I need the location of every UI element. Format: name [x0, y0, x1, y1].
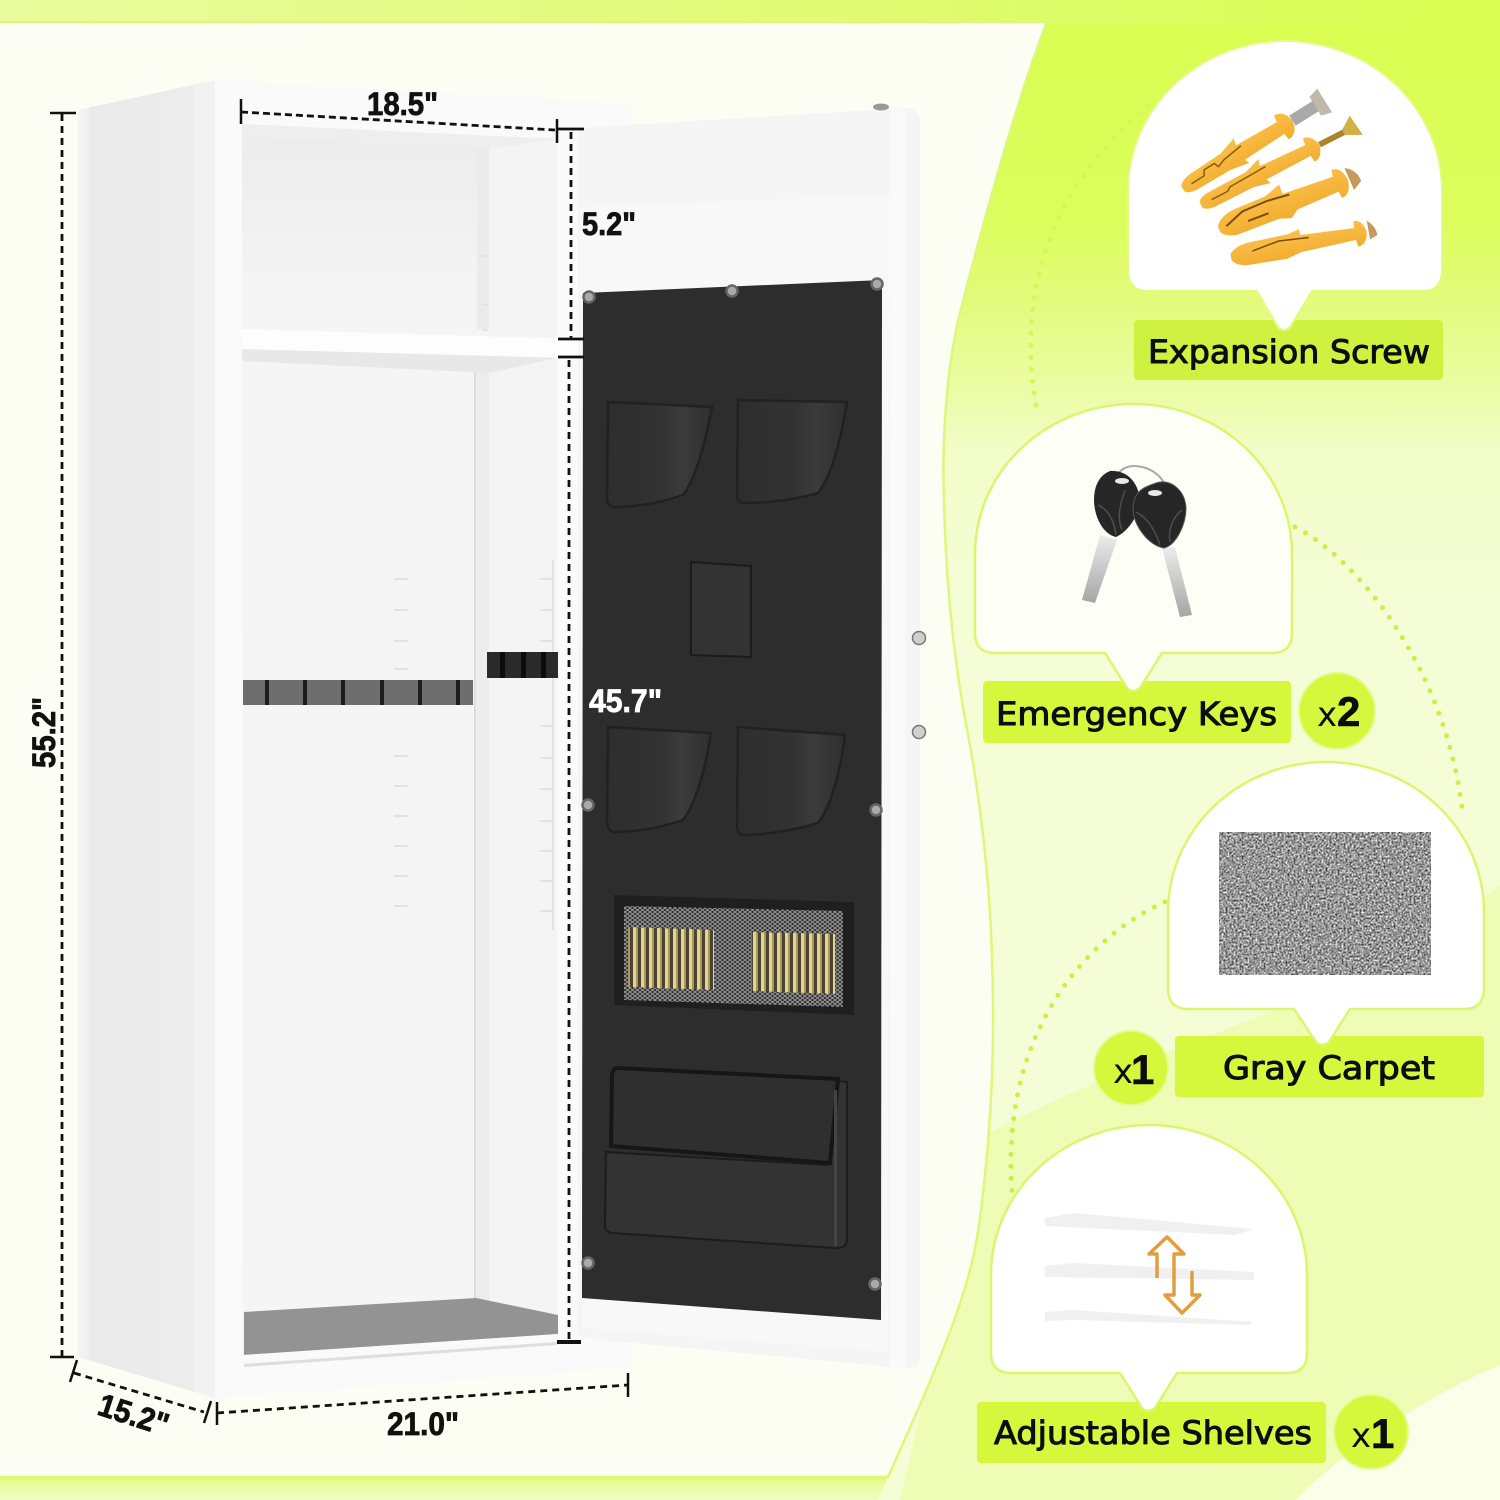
quantity badge x1: 1 [1371, 1410, 1394, 1457]
panel: expansion screw [1128, 41, 1443, 380]
dimension: depth of door shelf 5.2 and 45.7 [557, 129, 662, 1342]
door pin top [873, 104, 889, 110]
gun rack: side [487, 652, 558, 678]
dimension: height 55.2: 55.2" [26, 697, 62, 768]
door body [578, 108, 920, 1368]
carpet swatch [1219, 832, 1431, 975]
dimension: opening width 18.5: 18.5" [367, 86, 438, 122]
icon: three shelves [1045, 1213, 1254, 1325]
panel: adjustable shelves [977, 1125, 1408, 1469]
label background [977, 1402, 1326, 1463]
safe cabinet [78, 80, 630, 1398]
speech bubble [1168, 762, 1484, 1045]
speech bubble [1128, 41, 1442, 330]
text: emergency keys label: Emergency Keys [996, 695, 1277, 733]
pocket: upper left [607, 402, 712, 507]
cabinet bottom plinth [215, 1334, 628, 1398]
dimension: opening width 18.5 [241, 86, 557, 143]
label background [1175, 1036, 1484, 1097]
quantity badge x2: 2 [1337, 688, 1360, 735]
icon: screw anchors [1175, 87, 1379, 270]
label background [1134, 320, 1443, 380]
door height dashed lines [557, 129, 584, 1342]
ammo mesh holder [614, 895, 854, 1015]
key blades [1082, 535, 1192, 617]
quantity badge x2 [1299, 673, 1375, 749]
panel: emergency keys [975, 404, 1375, 749]
text: expansion screw label: Expansion Screw [1148, 333, 1430, 371]
gun rack: back [243, 680, 473, 705]
dimension: width 21.0 [217, 1373, 628, 1442]
quantity badge x2: x [1317, 695, 1337, 735]
pocket: lower right [737, 727, 845, 835]
dimension: depth 15.2 [70, 1360, 211, 1443]
dimension: depth 15.2: 15.2" [94, 1386, 173, 1443]
document pouch [605, 1068, 847, 1248]
black organizer panel [582, 280, 882, 1320]
key ring [1118, 466, 1165, 486]
key hole highlights [1115, 478, 1162, 496]
quantity badge x1 [1334, 1395, 1408, 1469]
key grooves [1098, 490, 1182, 545]
speech bubble [991, 1125, 1307, 1411]
quantity badge x1: 1 [1131, 1046, 1154, 1093]
icon: adjust arrow [1149, 1237, 1200, 1313]
quantity badge x1 [1094, 1031, 1168, 1105]
gray carpet floor [244, 1298, 558, 1355]
organizer screws [582, 278, 882, 1290]
text: 5.2 inch: 5.2" [582, 206, 636, 242]
icon: keys [1082, 466, 1192, 617]
text: gray carpet label: Gray Carpet [1223, 1049, 1435, 1087]
open door [578, 104, 926, 1368]
pocket: upper right [737, 400, 847, 503]
adjustable shelf [242, 329, 578, 373]
quantity badge x1: x [1113, 1052, 1133, 1092]
quantity badge x1: x [1351, 1416, 1371, 1456]
key heads [1094, 471, 1186, 548]
decorative connector: dotted arcs [1011, 100, 1462, 1191]
anchor 2 [1194, 112, 1364, 217]
pocket: lower left [607, 727, 711, 832]
text: 45.7 inch: 45.7" [589, 683, 662, 719]
dimension: width 21.0: 21.0" [387, 1406, 459, 1442]
dimension: height 55.2 [26, 113, 76, 1357]
anchor 4 [1228, 215, 1379, 270]
background: white curved panel [0, 22, 1047, 1477]
cabinet front frame [215, 80, 630, 1398]
card sleeve [691, 562, 751, 657]
label background [983, 681, 1291, 743]
panel: gray carpet [1094, 762, 1484, 1105]
anchor 1 [1175, 87, 1332, 201]
cabinet side panel [78, 80, 215, 1398]
anchor 3 [1212, 157, 1365, 244]
speech bubble [975, 404, 1292, 691]
door hinges [912, 632, 926, 738]
text: adjustable shelves label: Adjustable Shelves [994, 1414, 1312, 1452]
cabinet interior [242, 124, 557, 1356]
